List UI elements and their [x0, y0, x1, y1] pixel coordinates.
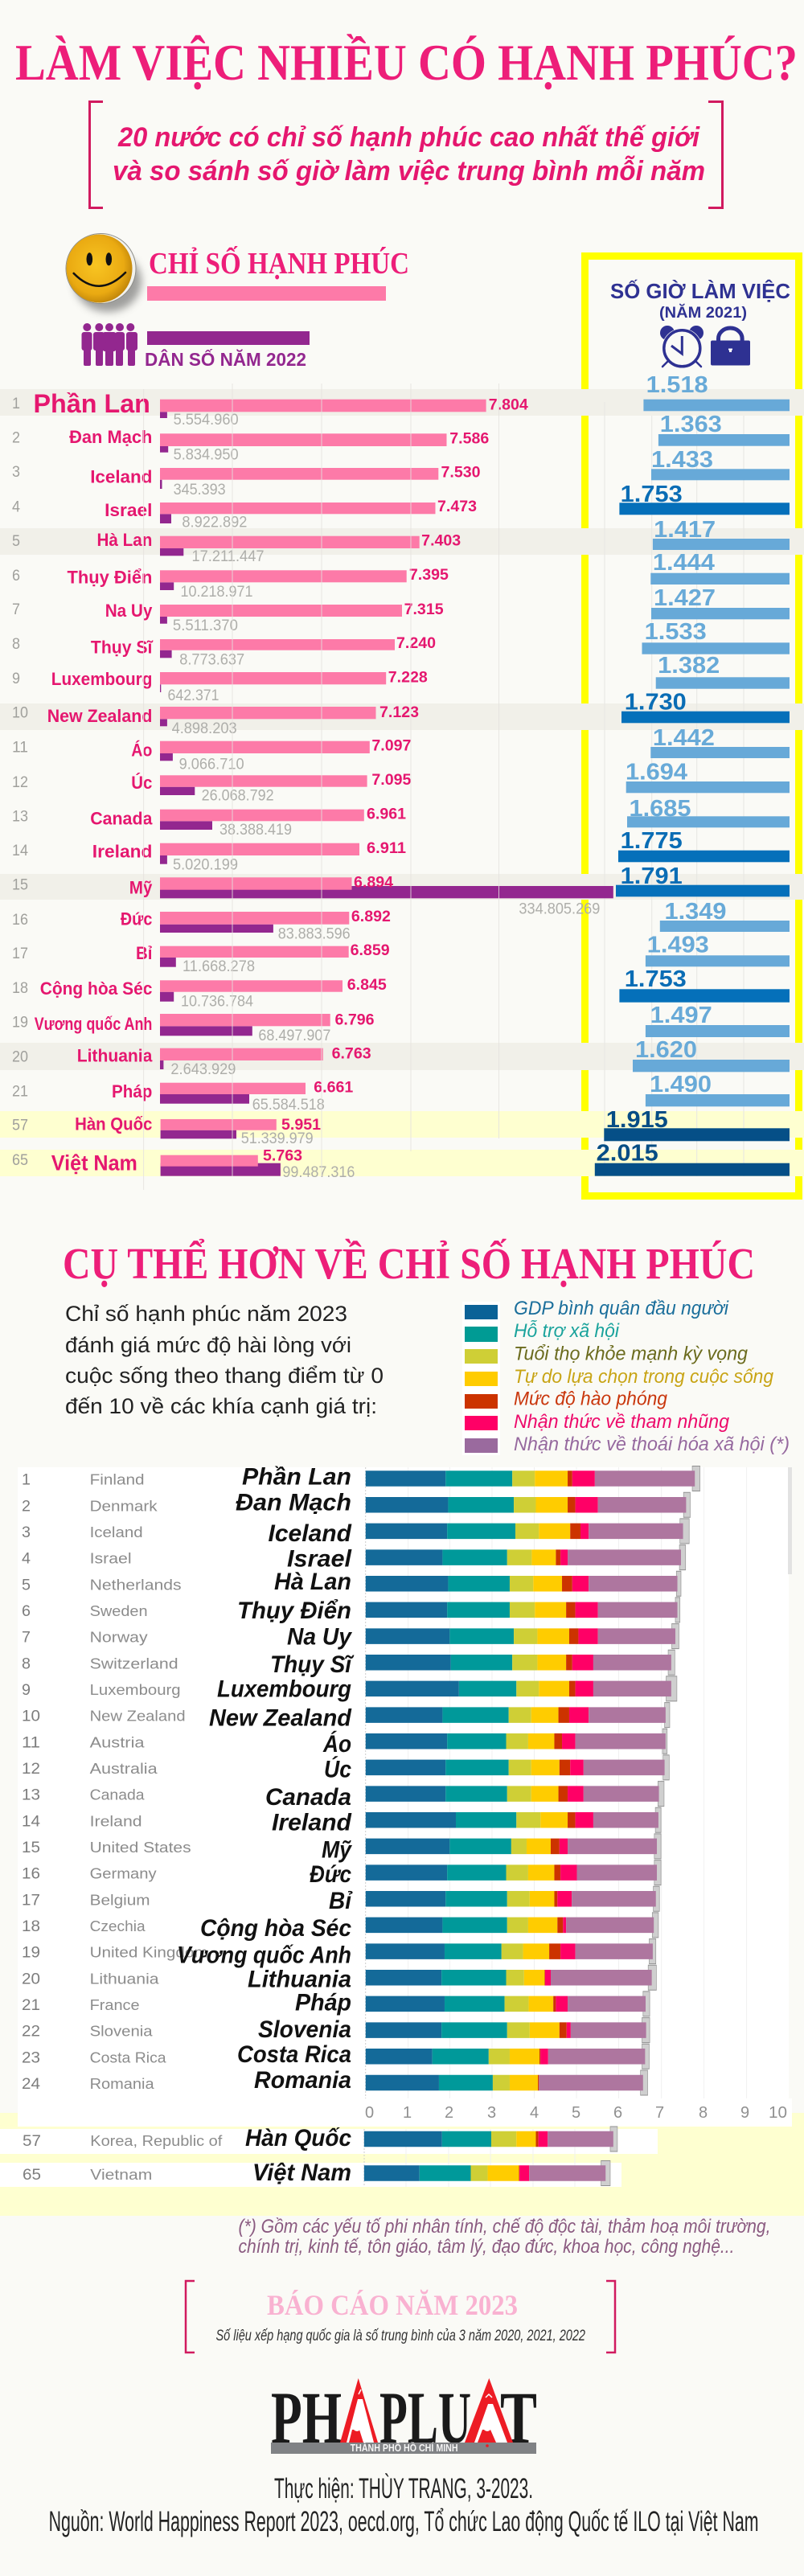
row: Hàn Quốc: Hàn Quốc	[75, 1114, 152, 1134]
row: Switzerland: 8	[22, 1655, 31, 1672]
pale yellow backdrop	[0, 2113, 804, 2216]
row: Cộng hòa Séc	[12, 966, 790, 1010]
panel: stacked bar chart	[0, 1464, 792, 2187]
row: Bỉ: 11.668.278	[183, 958, 255, 975]
x axis labels: 7	[655, 2104, 664, 2122]
row: Mỹ: 1.791	[621, 863, 683, 889]
x axis labels: 8	[699, 2104, 708, 2122]
report note with brackets	[186, 2281, 615, 2352]
row: Israel: 7.473	[437, 498, 477, 515]
row: United States: United States	[90, 1840, 191, 1856]
row: Denmark	[22, 1490, 690, 1517]
row: Luxembourg: 9	[12, 671, 20, 687]
subtitle block with brackets: 20 nước có chỉ số hạnh phúc cao nhất thế giới	[117, 122, 700, 153]
intro paragraph	[65, 1302, 384, 1418]
row: Ireland	[12, 828, 790, 873]
row: Canada: 13	[12, 809, 28, 825]
row: Lithuania: Lithuania	[248, 1967, 351, 1993]
row: Czechia: Cộng hòa Séc	[200, 1915, 351, 1942]
row: Iceland	[22, 1519, 689, 1547]
row: Costa Rica: Costa Rica	[90, 2049, 167, 2065]
row: Hà Lan: 17.211.447	[191, 548, 264, 565]
row: Pháp	[12, 1072, 790, 1114]
row: Pháp: 1.490	[650, 1072, 712, 1097]
row: Romania: Romania	[90, 2076, 155, 2092]
row: Lithuania	[12, 1037, 790, 1078]
legend: happiness components: GDP bình quân đầu người	[514, 1298, 729, 1319]
row: Iceland: Iceland	[269, 1520, 352, 1547]
row: Israel	[22, 1545, 686, 1573]
row: New Zealand: 7.123	[379, 704, 419, 721]
x axis labels: 4	[530, 2104, 539, 2122]
row: Slovenia: 22	[22, 2024, 40, 2041]
row: Việt Nam: 65	[12, 1152, 28, 1169]
x axis labels: 0	[365, 2104, 374, 2122]
row: New Zealand: 4.898.203	[172, 720, 237, 737]
row: Korea: Korea, Republic of	[90, 2133, 223, 2149]
row: Ireland: Ireland	[92, 842, 152, 862]
subtitle block with brackets: và so sánh số giờ làm việc trung bình mỗi năm	[113, 156, 705, 187]
row: Luxembourg: 7.228	[388, 670, 428, 687]
row: Phần Lan: Phần Lan	[34, 389, 150, 418]
row: Úc: Úc	[131, 773, 152, 793]
row: Lithuania: 1.620	[635, 1037, 697, 1063]
row: Switzerland: Switzerland	[90, 1655, 178, 1672]
row: Denmark: 2	[22, 1498, 31, 1515]
legend: happiness index: CHỈ SỐ HẠNH PHÚC	[149, 245, 409, 281]
row: Đức: Đức	[121, 909, 152, 929]
x axis labels: 2	[445, 2104, 453, 2122]
row: New Zealand: 10	[12, 704, 28, 722]
row: Thụy Sĩ: 1.533	[645, 619, 707, 645]
row: Na Uy: Na Uy	[105, 601, 153, 621]
row: Norway: 7	[22, 1630, 31, 1647]
row: Australia: Australia	[90, 1761, 158, 1777]
row: Canada	[12, 796, 790, 839]
row: Australia: Úc	[324, 1756, 351, 1783]
row: Norway: Na Uy	[287, 1624, 352, 1651]
row: Vietnam: Việt Nam	[252, 2160, 351, 2186]
row: New Zealand: New Zealand	[47, 706, 152, 726]
row: France: France	[90, 1997, 140, 2013]
row: Úc: 12	[12, 774, 28, 791]
row: Germany: Đức	[310, 1861, 351, 1888]
row: Mỹ: 6.894	[354, 874, 393, 891]
row: Germany	[22, 1860, 661, 1888]
row: Áo: 7.097	[371, 737, 411, 754]
row: Norway	[22, 1624, 679, 1651]
legend: happiness components: Nhận thức về tham nhũng	[514, 1411, 730, 1433]
row: Cộng hòa Séc: 6.845	[347, 977, 387, 994]
x axis labels: 5	[572, 2104, 580, 2122]
row: Luxembourg	[22, 1676, 677, 1703]
row: Lithuania: Lithuania	[90, 1971, 160, 1987]
row: Bỉ: 17	[12, 945, 28, 962]
row: Romania	[22, 2067, 648, 2095]
row: Thụy Điển	[12, 550, 790, 601]
row: Mỹ: 334.805.269	[519, 900, 600, 918]
row: Phần Lan: 5.554.960	[174, 411, 239, 429]
row: Pháp: 21	[12, 1084, 28, 1100]
row: Netherlands: Hà Lan	[274, 1569, 351, 1595]
row: Iceland: Iceland	[90, 1524, 143, 1540]
row: Slovenia: Slovenia	[258, 2016, 351, 2043]
row: Luxembourg: 9	[22, 1682, 31, 1699]
row: Việt Nam: 5.763	[263, 1147, 302, 1164]
icon: padlock	[711, 328, 750, 365]
row: Hàn Quốc: 1.915	[606, 1107, 668, 1133]
row: Austria: Áo	[322, 1730, 351, 1758]
row: Canada: Canada	[265, 1784, 351, 1811]
row: Austria: 11	[22, 1734, 40, 1751]
intro paragraph: đánh giá mức độ hài lòng với	[65, 1333, 351, 1357]
report note with brackets: Số liệu xếp hạng quốc gia là số trung bình của 3 năm 2020, 2021, 2022	[215, 2328, 585, 2344]
row: France: 21	[22, 1997, 40, 2014]
row: Luxembourg: Luxembourg	[51, 669, 152, 689]
row: New Zealand: New Zealand	[209, 1705, 352, 1732]
x axis labels: 9	[740, 2104, 749, 2122]
row: Norway: Norway	[90, 1630, 148, 1646]
row: Phần Lan	[12, 372, 790, 429]
row highlight bands	[0, 389, 804, 1176]
legend: happiness components	[462, 1298, 790, 1455]
row: Ireland: 6.911	[367, 840, 406, 857]
row: Bỉ: Bỉ	[136, 943, 152, 963]
row: Iceland: 1.433	[651, 447, 713, 473]
row: New Zealand	[22, 1703, 670, 1732]
row: Ireland	[22, 1807, 661, 1836]
logo: Pháp Luật: T	[500, 2377, 537, 2459]
intro paragraph: cuộc sống theo thang điểm từ 0	[65, 1364, 384, 1388]
row: Belgium	[22, 1886, 659, 1914]
row: United States	[22, 1834, 661, 1864]
row: Thụy Sĩ: Thụy Sĩ	[91, 638, 154, 658]
row: Đan Mạch: Đan Mạch	[69, 427, 152, 447]
row: Thụy Điển: 10.218.971	[180, 583, 252, 601]
row: Hà Lan	[12, 517, 790, 565]
row: New Zealand: 1.730	[625, 690, 687, 716]
row: Lithuania: 2.643.929	[170, 1060, 236, 1078]
row: Luxembourg: Luxembourg	[217, 1676, 351, 1703]
row: Ireland: 14	[12, 843, 28, 859]
row: United Kingdom: 19	[22, 1945, 40, 1962]
row: Đan Mạch: 7.586	[449, 431, 489, 448]
row: Thụy Điển: 7.395	[409, 567, 449, 584]
row: Na Uy	[12, 585, 790, 634]
row: Thụy Sĩ	[12, 619, 790, 669]
row: United Kingdom: Vương quốc Anh	[177, 1942, 351, 1969]
row: Pháp: 65.584.518	[252, 1096, 325, 1114]
row: Canada: 13	[22, 1787, 40, 1804]
row: Ireland: 14	[22, 1813, 40, 1830]
legend: happiness components: Nhận thức về thoái hóa xã hội (*)	[514, 1434, 790, 1455]
row: Sweden: Sweden	[90, 1603, 148, 1619]
row: Việt Nam: 2.015	[597, 1140, 658, 1166]
row: Phần Lan: 7.804	[489, 397, 528, 413]
row: Belgium: Belgium	[90, 1892, 150, 1908]
row: Lithuania: 20	[22, 1971, 40, 1987]
legend: happiness components: Tuổi thọ khỏe mạnh kỳ vọng	[514, 1343, 749, 1365]
row: Israel: Israel	[105, 500, 152, 520]
logo: Pháp Luật: PH	[271, 2377, 342, 2459]
row: Belgium: Bỉ	[329, 1888, 353, 1914]
row: Áo	[12, 725, 790, 773]
row: Na Uy: 5.511.370	[173, 617, 238, 634]
row: Switzerland: Thụy Sĩ	[270, 1651, 355, 1678]
row: Cộng hòa Séc: 1.753	[625, 966, 687, 992]
row: Luxembourg: 642.371	[167, 687, 219, 704]
row: Ireland: 1.775	[621, 828, 683, 854]
row: Netherlands	[22, 1569, 681, 1596]
footnote	[238, 2216, 770, 2258]
legend: population	[145, 331, 310, 370]
row: Czechia: 18	[22, 1918, 40, 1935]
row: Finland: Finland	[90, 1472, 145, 1488]
subtitle block with brackets	[90, 101, 722, 207]
row: Lithuania: 20	[12, 1048, 28, 1066]
row: Luxembourg: Luxembourg	[90, 1682, 181, 1698]
row: Cộng hòa Séc: Cộng hòa Séc	[40, 978, 152, 999]
legend: happiness components: Tự do lựa chọn trong cuộc sống	[514, 1366, 774, 1388]
row: Úc: 26.068.792	[202, 786, 274, 804]
row: Romania: Romania	[254, 2067, 351, 2094]
row: Vương quốc Anh: 19	[12, 1015, 28, 1031]
icon: smiley	[66, 233, 142, 312]
row: Việt Nam: 99.487.316	[282, 1163, 355, 1181]
row: Australia: 12	[22, 1761, 40, 1778]
row: Bỉ: 1.493	[647, 933, 709, 958]
row: Mỹ: Mỹ	[129, 878, 153, 898]
row: Costa Rica: 23	[22, 2049, 40, 2066]
row: Thụy Điển: 6	[12, 568, 20, 585]
row: Cộng hòa Séc: 18	[12, 980, 28, 997]
row: Vương quốc Anh: 68.497.907	[258, 1027, 330, 1044]
row: Hàn Quốc: 5.951	[281, 1117, 321, 1134]
row: Lithuania: 6.763	[332, 1046, 371, 1063]
row: Israel: Israel	[90, 1551, 132, 1567]
row: Iceland: Iceland	[90, 467, 152, 487]
row: Vietnam	[23, 2160, 610, 2186]
row: Canada: Canada	[90, 1787, 146, 1803]
row: Thụy Điển: Thụy Điển	[68, 568, 152, 588]
intro paragraph: Chỉ số hạnh phúc năm 2023	[65, 1302, 347, 1326]
icon: people	[82, 323, 137, 366]
row: Canada: 38.388.419	[219, 821, 292, 839]
row: Bỉ	[12, 933, 790, 975]
row: France: Pháp	[295, 1990, 351, 2016]
row: Vương quốc Anh: 6.796	[334, 1012, 375, 1029]
row: Switzerland	[22, 1650, 675, 1678]
row: Ireland: Ireland	[90, 1813, 142, 1829]
row: Israel: 4	[22, 1551, 31, 1568]
row: Israel: 8.922.892	[182, 513, 247, 531]
row: Na Uy: 7	[12, 601, 20, 618]
row: Đức: 1.349	[664, 899, 727, 925]
row: Iceland: 3	[12, 464, 20, 481]
row: Luxembourg	[12, 653, 790, 704]
working hours heading: SỐ GIỜ LÀM VIỆC	[610, 279, 790, 303]
row: Phần Lan: 1.518	[646, 372, 708, 398]
row: Việt Nam	[12, 1140, 790, 1181]
row: Canada	[22, 1782, 664, 1811]
row: Thụy Điển: 1.444	[653, 550, 715, 576]
yellow frame: working hours	[585, 256, 799, 1196]
row: Sweden	[22, 1598, 680, 1624]
row: Vietnam: 65	[23, 2167, 41, 2184]
x axis labels: 1	[403, 2104, 412, 2122]
row: Hàn Quốc: 57	[12, 1118, 28, 1134]
row: Đan Mạch: 1.363	[660, 412, 722, 437]
row: Korea: 57	[23, 2133, 41, 2150]
row: Hà Lan: 5	[12, 533, 20, 550]
legend: happiness components: Mức độ hào phóng	[514, 1388, 668, 1410]
row: Finland: Phần Lan	[242, 1464, 351, 1491]
legend: happiness index	[147, 245, 409, 301]
row: Australia	[22, 1755, 669, 1783]
x axis labels: 6	[613, 2104, 622, 2122]
row: Slovenia: Slovenia	[90, 2024, 154, 2040]
row: Belgium: 17	[22, 1892, 40, 1909]
row: Đức: 83.883.596	[278, 925, 351, 942]
row: Ireland: Ireland	[272, 1810, 352, 1836]
row: Đan Mạch: 2	[12, 429, 20, 447]
row: Israel: 1.753	[621, 482, 683, 507]
row: Na Uy: 1.427	[654, 585, 716, 611]
footnote: chính trị, kinh tế, tôn giáo, tâm lý, đạo đức, khoa học, công nghệ...	[238, 2236, 735, 2258]
row: Germany: 16	[22, 1866, 40, 1883]
row: Pháp: Pháp	[112, 1081, 152, 1101]
row: Austria	[22, 1729, 667, 1758]
row: Mỹ: 15	[12, 876, 28, 894]
row: Đức: 6.892	[351, 909, 391, 925]
row: New Zealand	[12, 690, 790, 737]
row: Czechia	[22, 1913, 658, 1942]
x axis labels: 10	[769, 2104, 787, 2122]
row: Costa Rica	[22, 2041, 649, 2069]
row: Úc: 7.095	[371, 772, 412, 789]
row: United Kingdom: United Kingdom	[90, 1945, 208, 1961]
row: Denmark: Denmark	[90, 1498, 158, 1514]
row: Sweden: Thụy Điển	[237, 1598, 351, 1624]
row: Bỉ: 6.859	[351, 942, 390, 959]
row: Korea	[23, 2125, 617, 2151]
row: Cộng hòa Séc: 10.736.784	[181, 992, 253, 1010]
row: Austria: Austria	[90, 1734, 146, 1750]
row: Áo: 1.442	[653, 725, 715, 751]
row: Đức	[12, 899, 790, 942]
row: Vương quốc Anh	[12, 1003, 790, 1044]
logo: Pháp Luật	[271, 2377, 537, 2459]
row: New Zealand: 10	[22, 1708, 40, 1725]
row: Áo: 11	[12, 740, 28, 756]
row: Iceland: 7.530	[441, 465, 481, 482]
row: Đức: 16	[12, 912, 28, 929]
row: Lithuania	[22, 1965, 656, 1993]
row: Hà Lan: Hà Lan	[96, 530, 152, 550]
row: Romania: 24	[22, 2076, 40, 2093]
x axis labels	[365, 2104, 787, 2122]
row: New Zealand: New Zealand	[90, 1708, 186, 1725]
row: Netherlands: Netherlands	[90, 1577, 182, 1593]
row: United Kingdom	[22, 1939, 656, 1969]
x axis labels: 3	[487, 2104, 496, 2122]
row: Việt Nam: Việt Nam	[51, 1151, 137, 1175]
row: France	[22, 1990, 650, 2016]
row: Costa Rica: Costa Rica	[237, 2041, 351, 2068]
row: Thụy Sĩ: 8.773.637	[179, 651, 244, 669]
row: Phần Lan: 1	[12, 396, 20, 412]
row: Netherlands: 5	[22, 1577, 31, 1594]
logo: Pháp Luật: THÀNH PHỐ HỒ CHÍ MINH	[351, 2442, 458, 2454]
row: Áo: Áo	[131, 740, 152, 761]
row: Israel: 4	[12, 498, 20, 516]
row: Germany: Germany	[90, 1866, 157, 1882]
row: United States: 15	[22, 1840, 40, 1856]
intro paragraph: đến 10 về các khía cạnh giá trị:	[65, 1394, 377, 1418]
row: Korea: Hàn Quốc	[245, 2125, 351, 2151]
row: Canada: Canada	[90, 809, 153, 829]
row: Thụy Sĩ: 7.240	[396, 635, 436, 652]
row: Áo: 9.066.710	[179, 756, 244, 773]
working hours heading: (NĂM 2021)	[659, 304, 747, 322]
row: Lithuania: Lithuania	[77, 1046, 153, 1066]
icon: alarm clock	[660, 326, 704, 368]
row: Iceland: 3	[22, 1524, 31, 1541]
row: Canada: 1.685	[629, 796, 691, 822]
row: Na Uy: 7.315	[404, 601, 444, 618]
report note with brackets: BÁO CÁO NĂM 2023	[267, 2289, 518, 2321]
logo: Pháp Luật: PLU	[379, 2377, 471, 2459]
row: Đan Mạch: 5.834.950	[174, 445, 239, 463]
credit line: Thực hiện: THÙY TRANG, 3-2023.	[274, 2473, 533, 2504]
row: Iceland: 345.393	[174, 481, 226, 498]
row: Israel: Israel	[287, 1546, 352, 1573]
row: Finland	[22, 1464, 700, 1491]
row: Sweden: 6	[22, 1603, 31, 1620]
row: Thụy Sĩ: 8	[12, 636, 20, 653]
row: Vương quốc Anh: 1.497	[650, 1003, 712, 1028]
row: Hà Lan: 7.403	[421, 533, 461, 550]
row: Vương quốc Anh: Vương quốc Anh	[35, 1014, 152, 1034]
row: United States: Mỹ	[322, 1837, 352, 1864]
row: Israel	[12, 482, 790, 531]
row: Luxembourg: 1.382	[658, 653, 720, 679]
legend: happiness components: Hỗ trợ xã hội	[514, 1319, 620, 1342]
row: Hàn Quốc	[12, 1107, 790, 1147]
row: Hà Lan: 1.417	[654, 517, 716, 543]
row: Đan Mạch	[12, 412, 790, 463]
row: Mỹ	[12, 863, 790, 918]
row: Denmark: Đan Mạch	[236, 1490, 351, 1516]
row: Vietnam: Vietnam	[90, 2167, 152, 2183]
row: Úc	[12, 759, 790, 804]
row: Czechia: Czechia	[90, 1918, 146, 1934]
row: Finland: 1	[22, 1472, 31, 1489]
row: Slovenia	[22, 2016, 650, 2043]
row: Iceland	[12, 447, 790, 498]
row: Úc: 1.694	[626, 759, 687, 785]
row: Hàn Quốc: 51.339.979	[241, 1130, 314, 1147]
working hours heading	[610, 279, 790, 322]
row: Pháp: 6.661	[314, 1080, 354, 1097]
legend: population: DÂN SỐ NĂM 2022	[145, 348, 306, 370]
row: Ireland: 5.020.199	[173, 855, 238, 873]
row: Canada: 6.961	[367, 806, 406, 823]
